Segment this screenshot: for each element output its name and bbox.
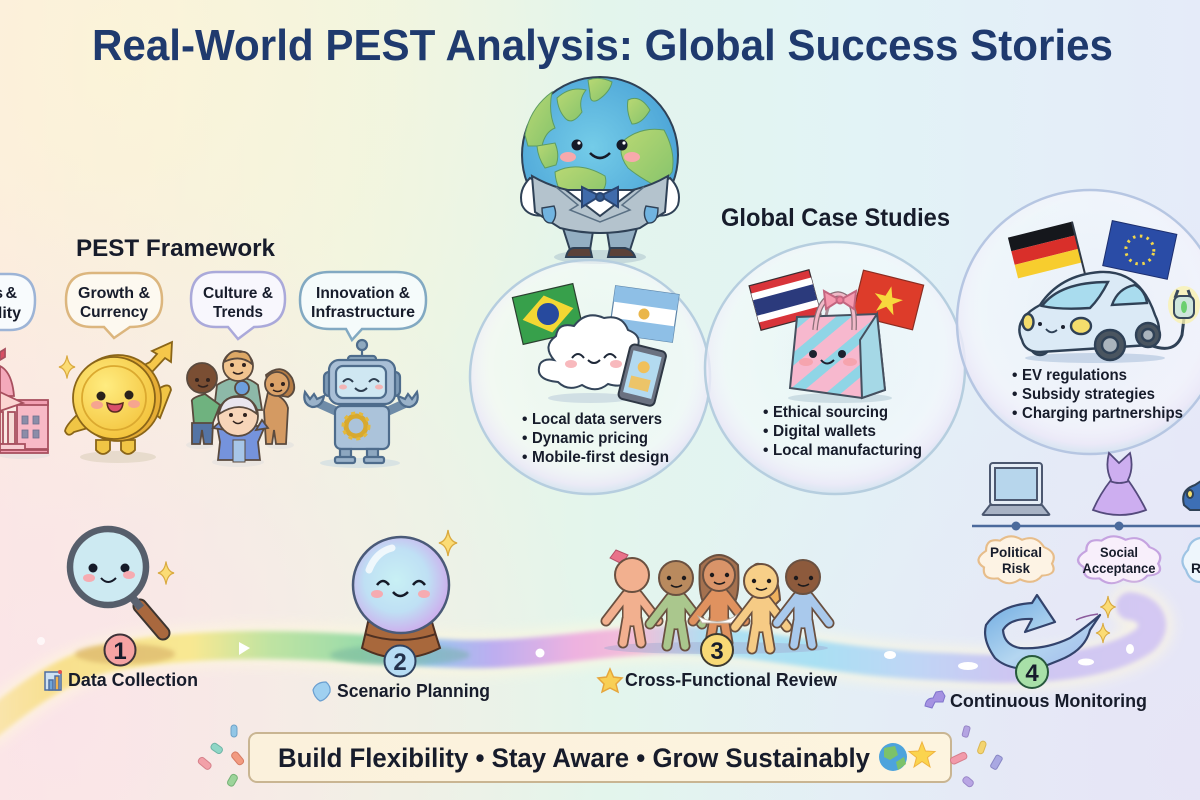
text: Southeast Asia tactics: Ethical sourcing (773, 404, 888, 421)
timeline axis (972, 522, 1200, 530)
step 1: data collection (45, 529, 198, 690)
cloud tag: Political Risk (978, 536, 1054, 583)
icon: smartphone (618, 343, 667, 407)
icon: laptop (983, 463, 1049, 515)
confetti: right of banner (949, 725, 1003, 788)
text: Europe tactics: Subsidy strategies (1022, 386, 1155, 403)
text: Latin America tactics: Mobile-first design (532, 449, 669, 466)
text: Latin America tactics: Local data servers (532, 411, 662, 428)
case bubble: Southeast Asia (705, 242, 965, 494)
heading: Global Case Studies: Global Case Studies (721, 204, 950, 232)
text: Europe tactics: • (1012, 367, 1017, 384)
speech bubble: culture and trends (191, 272, 285, 339)
step 2: scenario planning (313, 530, 490, 701)
speech bubble: growth and currency (66, 273, 162, 338)
text: Europe tactics: • (1012, 405, 1017, 422)
icon: smiling gold coin with arrow (65, 342, 172, 463)
confetti: left of banner (197, 725, 245, 787)
text: Southeast Asia tactics: • (763, 404, 768, 421)
label: continuous monitoring: Continuous Monitoring (950, 691, 1147, 711)
icon: monitoring arrow glyph (925, 691, 945, 708)
cloud tag: Political Risk: Risk (1002, 560, 1030, 576)
sparkle (158, 562, 174, 584)
text: Europe tactics: • (1012, 386, 1017, 403)
cloud tag: Social Acceptance: Acceptance (1082, 560, 1156, 576)
speech bubble: growth and currency: Currency (80, 304, 148, 321)
sparkle (439, 530, 457, 556)
label: cross-functional review: Cross-Functional Review (625, 670, 838, 690)
icon: smiling shopping bag (788, 291, 892, 403)
label: data collection: Data Collection (68, 670, 198, 690)
icon: team holding hands (604, 550, 829, 654)
number badge 3 (701, 634, 733, 666)
mascot: globe character in suit (521, 77, 679, 264)
speech bubble: culture and trends: Trends (213, 304, 263, 321)
icon: government building (0, 349, 50, 459)
icon: globe emoji (879, 743, 907, 771)
number badge 2: 2 (393, 649, 407, 676)
cloud tag: Political Risk: Political (990, 544, 1042, 560)
cloud tag: Social Acceptance (1078, 536, 1160, 583)
cloud tag: Social Acceptance: Social (1100, 544, 1138, 560)
number badge 2 (384, 646, 416, 676)
icon: star emoji (909, 742, 935, 767)
panel: four-step process road (0, 529, 1152, 725)
text: Southeast Asia tactics: • (763, 423, 768, 440)
text: Southeast Asia tactics: Local manufacturing (773, 442, 922, 459)
bubble shell (957, 190, 1200, 454)
number badge 1: 1 (113, 638, 127, 665)
panel: Global case studies (470, 190, 1200, 494)
label: scenario planning: Scenario Planning (337, 681, 490, 701)
bubble shell (705, 242, 965, 494)
cloud tag: clipped third tag (1182, 538, 1200, 582)
icon: purple dress (1093, 453, 1146, 515)
text: Latin America tactics: Dynamic pricing (532, 430, 648, 447)
text: Southeast Asia tactics: • (763, 442, 768, 459)
speech bubble: innovation and infrastructure: Infrastructure (311, 304, 415, 321)
text: Latin America tactics: • (522, 449, 527, 466)
bubble shell (470, 260, 710, 494)
speech bubble: politics and stability (0, 274, 35, 330)
speech bubble: innovation and infrastructure (300, 272, 426, 340)
panel: risk timeline (972, 453, 1200, 583)
icon: magnifying glass (70, 529, 163, 633)
text: Southeast Asia tactics (763, 404, 922, 459)
step 4: continuous monitoring (925, 595, 1147, 711)
icon: smiling cloud (539, 315, 639, 403)
banner text: Build Flexibility • Stay Aware • Grow Sustainably (278, 743, 870, 773)
title: Real-World PEST Analysis: Global Success Stories (92, 21, 1113, 70)
icon: blue car, clipped at edge (1183, 475, 1200, 510)
flag: Thailand (749, 270, 821, 330)
flag: European Union (1103, 221, 1177, 279)
flag: Brazil (512, 284, 584, 344)
number badge 4 (1016, 656, 1048, 688)
icon: data chart (45, 670, 62, 690)
text: Europe tactics (1012, 367, 1183, 422)
text: Europe tactics: EV regulations (1022, 367, 1127, 384)
panel: PEST framework (0, 235, 426, 468)
icon: circular arrow (985, 595, 1100, 669)
flag: Argentina (609, 286, 679, 342)
icon: star (598, 669, 622, 692)
icon: crystal ball (353, 537, 449, 658)
case bubble: Latin America (470, 260, 710, 494)
icon: diverse group of people (186, 351, 294, 467)
icon: sparkle near coin (59, 356, 75, 378)
text: Europe tactics: Charging partnerships (1022, 405, 1183, 422)
text: Latin America tactics: • (522, 430, 527, 447)
text: Latin America tactics (522, 411, 669, 466)
case bubble: Europe (957, 190, 1200, 454)
text: Southeast Asia tactics: Digital wallets (773, 423, 876, 440)
sparkles (1096, 596, 1116, 643)
flag: Germany (1008, 222, 1087, 297)
speech bubble: innovation and infrastructure: Innovation & (316, 285, 410, 302)
icon: gem (313, 682, 330, 701)
number badge 1 (104, 634, 136, 666)
number badge 3: 3 (710, 638, 724, 665)
number badge 4: 4 (1025, 660, 1039, 687)
step 3: cross-functional review (598, 550, 838, 692)
banner: closing message (249, 733, 951, 782)
speech bubble: growth and currency: Growth & (78, 285, 150, 302)
icon: friendly robot (304, 340, 418, 468)
heading: PEST Framework: PEST Framework (76, 235, 276, 262)
text: Latin America tactics: • (522, 411, 527, 428)
icon: smiling electric car (1019, 272, 1184, 363)
speech bubble: culture and trends: Culture & (203, 285, 273, 302)
rainbow road (0, 606, 1152, 725)
icon: charging plug (1168, 286, 1200, 324)
flag: Vietnam (852, 270, 924, 330)
